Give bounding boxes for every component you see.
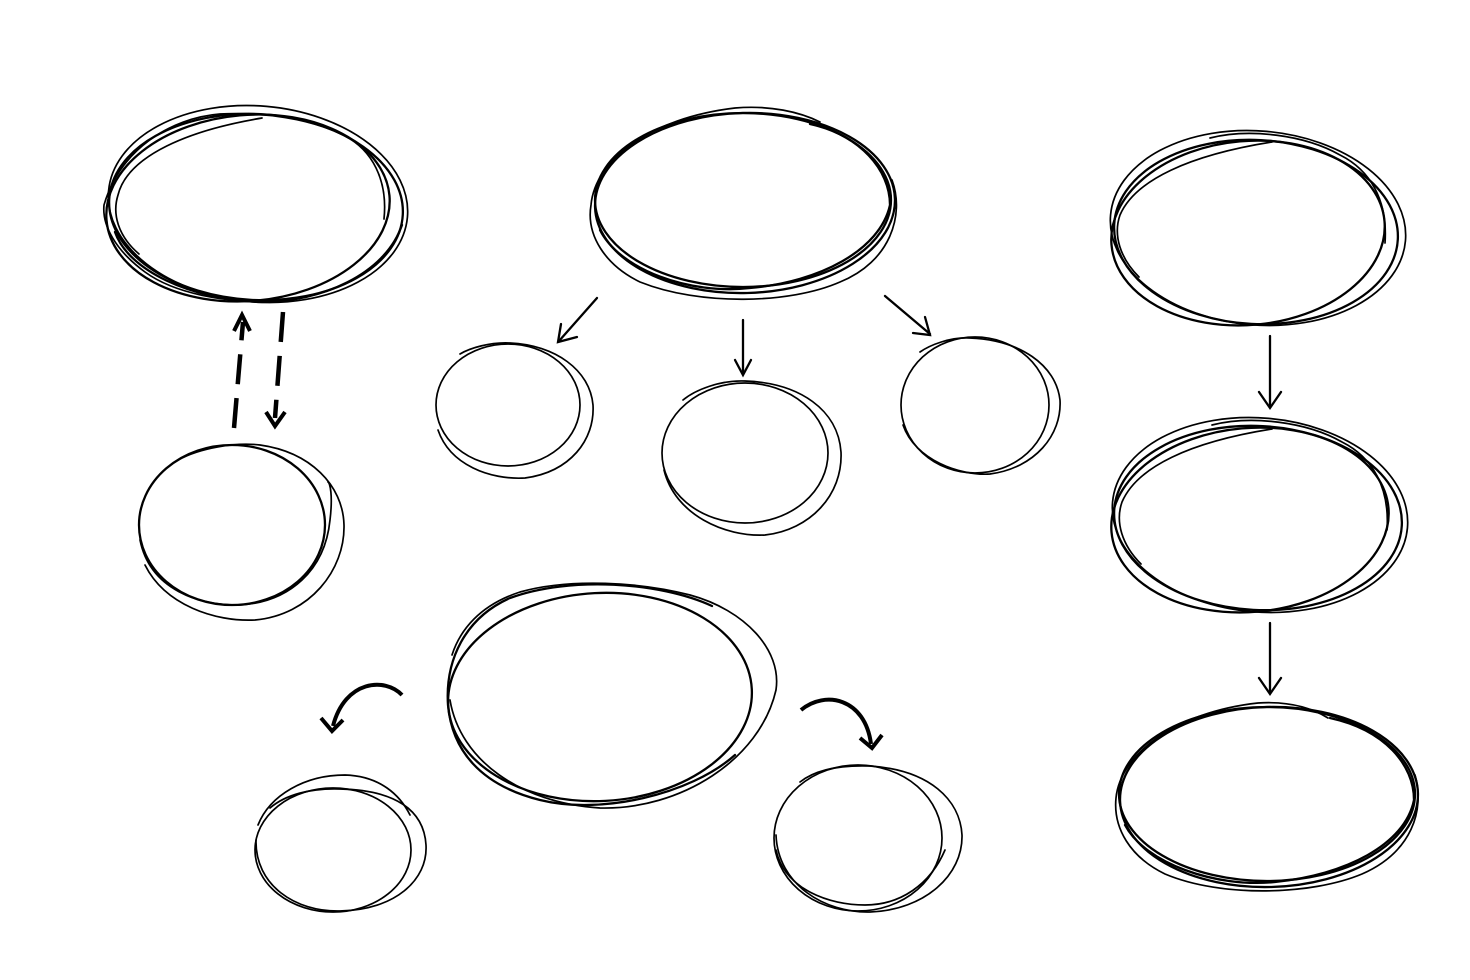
scribbled oval: bottom centre large [443, 583, 777, 809]
scribbled oval: right top [1102, 118, 1414, 338]
dashed arrow: down [266, 312, 285, 426]
arrow: right top to middle [1259, 336, 1281, 408]
scribbled oval: right middle [1104, 405, 1416, 625]
scribbled circle: centre row middle [662, 381, 841, 535]
dashed arrow: up [234, 315, 250, 428]
arrow: top centre to middle [735, 320, 751, 375]
arrow: top centre to left [558, 298, 597, 342]
curved arrow: bottom right [801, 700, 882, 748]
scribbled circle: bottom right [774, 765, 962, 912]
curved arrow: bottom left [321, 685, 402, 731]
arrow: top centre to right [885, 296, 930, 335]
scribbled circle: centre row right [901, 337, 1060, 474]
scribbled oval: top left large [98, 93, 416, 315]
scribbled circle: left small [139, 444, 344, 620]
arrow: right middle to bottom [1259, 623, 1281, 694]
scribbled circle: centre row left [436, 343, 593, 478]
scribbled circle: bottom left [255, 775, 426, 912]
scribbled oval: top centre large [590, 107, 897, 299]
scribbled oval: right bottom [1116, 703, 1420, 891]
